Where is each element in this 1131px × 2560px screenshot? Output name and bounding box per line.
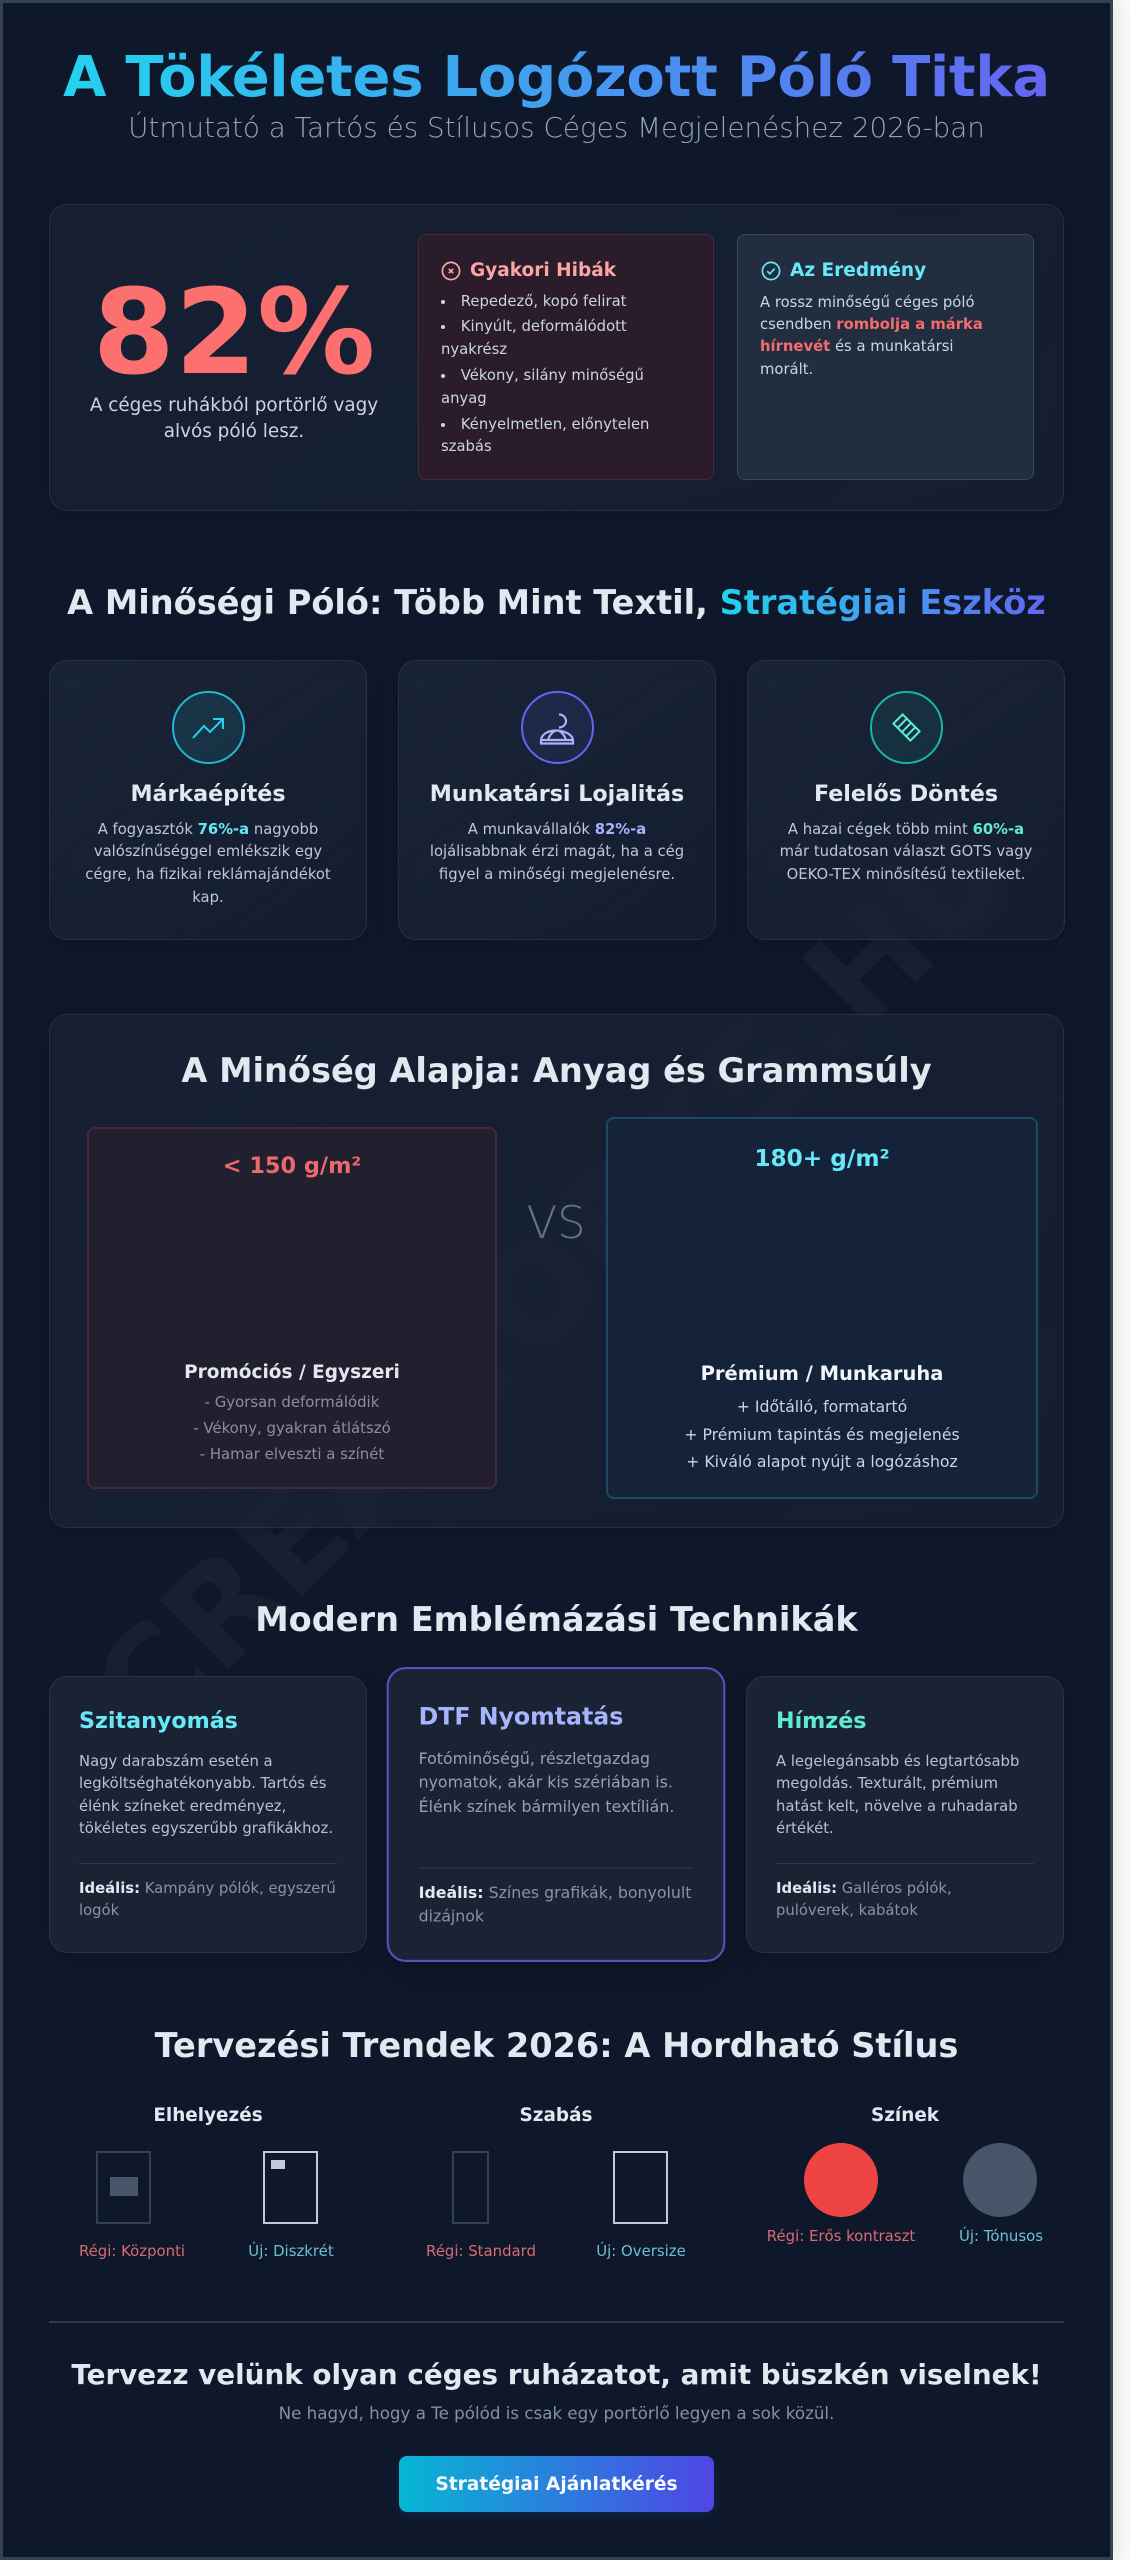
panel: material comparison — [49, 1014, 1064, 1528]
new oversize cut — [613, 2150, 668, 2224]
watermark: CREAWORKS.HU — [63, 792, 1041, 1770]
card text: lojálisabbnak érzi magát, ha a cég — [430, 843, 684, 860]
cta button: Stratégiai Ajánlatkérés — [435, 2474, 678, 2495]
ideal use: Ideális: Galléros pólók, — [776, 1880, 952, 1897]
heading: trends: Tervezési Trendek 2026: A Hordható Stílus — [155, 2026, 958, 2064]
card text — [430, 821, 684, 883]
old strong colour — [804, 2143, 878, 2217]
technique text: Élénk színek bármilyen textílián. — [419, 1798, 674, 1816]
label: Régi: Erős kontraszt — [767, 2227, 915, 2245]
panel: result — [737, 234, 1034, 480]
technique text: értékét. — [776, 1820, 834, 1837]
technique title: DTF Nyomtatás — [419, 1703, 623, 1731]
card text: A fogyasztók 76%-a nagyobb — [98, 821, 318, 838]
icon: trending up — [172, 691, 244, 764]
column heading: colours: Színek — [871, 2105, 939, 2126]
icon: certificate tag — [870, 691, 942, 764]
technique text: nyomatok, akár kis szériában is. — [419, 1774, 673, 1792]
stat number: 82% — [93, 263, 375, 401]
icon: check circle — [762, 262, 780, 280]
technique text — [419, 1750, 674, 1816]
technique text: A legelegánsabb és legtartósabb — [776, 1753, 1019, 1770]
mistakes heading: Gyakori Hibák — [470, 260, 616, 281]
mistakes list: nyakrész — [441, 341, 507, 358]
benefits: + Prémium tapintás és megjelenés — [684, 1425, 960, 1444]
panel: light fabric — [87, 1127, 497, 1489]
technique text: megoldás. Texturált, prémium — [776, 1775, 998, 1792]
cta text: Ne hagyd, hogy a Te pólód is csak egy portörlő legyen a sok közül. — [279, 2403, 834, 2423]
technique text: hatást kelt, növelve a ruhadarab — [776, 1798, 1018, 1815]
result text: csendben rombolja a márka — [760, 316, 983, 333]
card: embroidery — [746, 1676, 1064, 1953]
result text: hírnevét és a munkatársi — [760, 338, 954, 355]
result text: morált. — [760, 361, 813, 378]
card text: A munkavállalók 82%-a — [468, 821, 646, 838]
ideal use — [419, 1884, 692, 1926]
card heading: Márkaépítés — [130, 781, 286, 807]
mistakes list: Kinyúlt, deformálódott — [461, 318, 627, 335]
new discreet print — [263, 2150, 318, 2224]
card text — [780, 821, 1032, 883]
label: Új: Tónusos — [959, 2227, 1043, 2245]
type: Promóciós / Egyszeri — [184, 1362, 400, 1382]
card text: valószínűséggel emlékszik egy — [94, 843, 322, 860]
card text: figyel a minőségi megjelenésre. — [439, 866, 675, 883]
big statistic — [90, 263, 378, 442]
technique text — [79, 1753, 333, 1837]
benefits: + Kiváló alapot nyújt a logózáshoz — [686, 1452, 958, 1471]
stat caption: A céges ruhákból portörlő vagy — [90, 395, 378, 416]
card text: kap. — [192, 889, 224, 906]
card heading: Felelős Döntés — [814, 781, 998, 807]
ideal use: pulóverek, kabátok — [776, 1902, 918, 1919]
ideal use: logók — [79, 1902, 119, 1919]
card text: már tudatosan választ GOTS vagy — [780, 843, 1032, 860]
benefits — [684, 1397, 960, 1471]
card heading: Munkatársi Lojalitás — [430, 781, 684, 807]
label: Új: Diszkrét — [248, 2242, 334, 2260]
label: Régi: Standard — [426, 2242, 536, 2260]
column heading: placement: Elhelyezés — [153, 2105, 263, 2126]
icon: x circle — [442, 262, 460, 280]
mistakes list: szabás — [441, 438, 492, 455]
ideal use: Ideális: Színes grafikák, bonyolult — [419, 1884, 691, 1902]
cta heading: Tervezz velünk olyan céges ruházatot, amit büszkén viselnek! — [71, 2358, 1042, 2391]
result heading: Az Eredmény — [790, 260, 926, 281]
old central print — [96, 2150, 151, 2224]
type: Prémium / Munkaruha — [701, 1362, 943, 1385]
card: DTF printing highlighted — [387, 1667, 725, 1962]
technique text — [776, 1753, 1019, 1837]
technique text: élénk színeket eredményez, — [79, 1798, 286, 1815]
stat caption — [90, 395, 378, 442]
ideal use: Ideális: Kampány pólók, egyszerű — [79, 1880, 336, 1897]
panel: 82% problem statement — [49, 204, 1064, 511]
result text — [760, 294, 983, 378]
comparison heading: A Minőség Alapja: Anyag és Grammsúly — [181, 1051, 932, 1090]
panel: premium fabric — [606, 1117, 1038, 1499]
heading: strategic tool: A Minőségi Póló: Több Mint Textil, Stratégiai Eszköz — [67, 583, 1046, 622]
drawbacks: - Gyorsan deformálódik — [205, 1393, 379, 1411]
column heading: cut: Szabás — [520, 2105, 592, 2126]
mistakes list — [441, 292, 649, 455]
card text — [85, 821, 331, 906]
ideal use — [776, 1880, 952, 1919]
card text: OEKO-TEX minősítésű textileket. — [787, 866, 1025, 883]
card: responsible decision — [747, 660, 1065, 940]
technique title: Hímzés — [776, 1708, 866, 1734]
new tonal colour — [963, 2143, 1037, 2217]
drawbacks: - Vékony, gyakran átlátszó — [193, 1419, 391, 1437]
card text: A hazai cégek több mint 60%-a — [788, 821, 1024, 838]
result text: A rossz minőségű céges póló — [760, 294, 975, 311]
technique title: Szitanyomás — [79, 1708, 238, 1734]
panel: common mistakes — [418, 234, 714, 480]
drawbacks — [193, 1393, 391, 1463]
heading: techniques: Modern Emblémázási Technikák — [255, 1600, 858, 1639]
stat caption: alvós póló lesz. — [164, 421, 304, 442]
card text: cégre, ha fizikai reklámajándékot — [85, 866, 331, 883]
vs label: VS — [526, 1196, 586, 1249]
trends section — [79, 2105, 1043, 2260]
card: brand building — [49, 660, 367, 940]
ideal use: dizájnok — [419, 1908, 484, 1926]
mistakes list: Repedező, kopó felirat — [461, 292, 626, 310]
card: employee loyalty — [398, 660, 716, 940]
technique text: Nagy darabszám esetén a — [79, 1753, 273, 1770]
call to action — [71, 2358, 1042, 2519]
subtitle: Útmutató a Tartós és Stílusos Céges Megjelenéshez 2026-ban — [128, 111, 985, 144]
mistakes list: Kényelmetlen, előnytelen — [461, 416, 649, 433]
drawbacks: - Hamar elveszti a színét — [200, 1445, 384, 1463]
cta button — [399, 2456, 714, 2512]
label: Új: Oversize — [596, 2242, 686, 2260]
benefits: + Időtálló, formatartó — [737, 1397, 907, 1416]
technique text: legköltséghatékonyabb. Tartós és — [79, 1775, 326, 1792]
old standard cut — [452, 2150, 489, 2224]
mistakes list: Vékony, silány minőségű — [461, 367, 644, 384]
mistakes list: anyag — [441, 390, 487, 407]
weight: < 150 g/m² — [223, 1152, 361, 1178]
weight: 180+ g/m² — [754, 1145, 890, 1172]
card: screen printing — [49, 1676, 367, 1953]
label: Régi: Központi — [79, 2242, 185, 2260]
ideal use — [79, 1880, 336, 1919]
icon: user — [520, 691, 594, 764]
title: A Tökéletes Logózott Póló Titka — [63, 45, 1050, 110]
technique text: tökéletes egyszerűbb grafikákhoz. — [79, 1820, 333, 1837]
technique text: Fotóminőségű, részletgazdag — [419, 1750, 650, 1768]
